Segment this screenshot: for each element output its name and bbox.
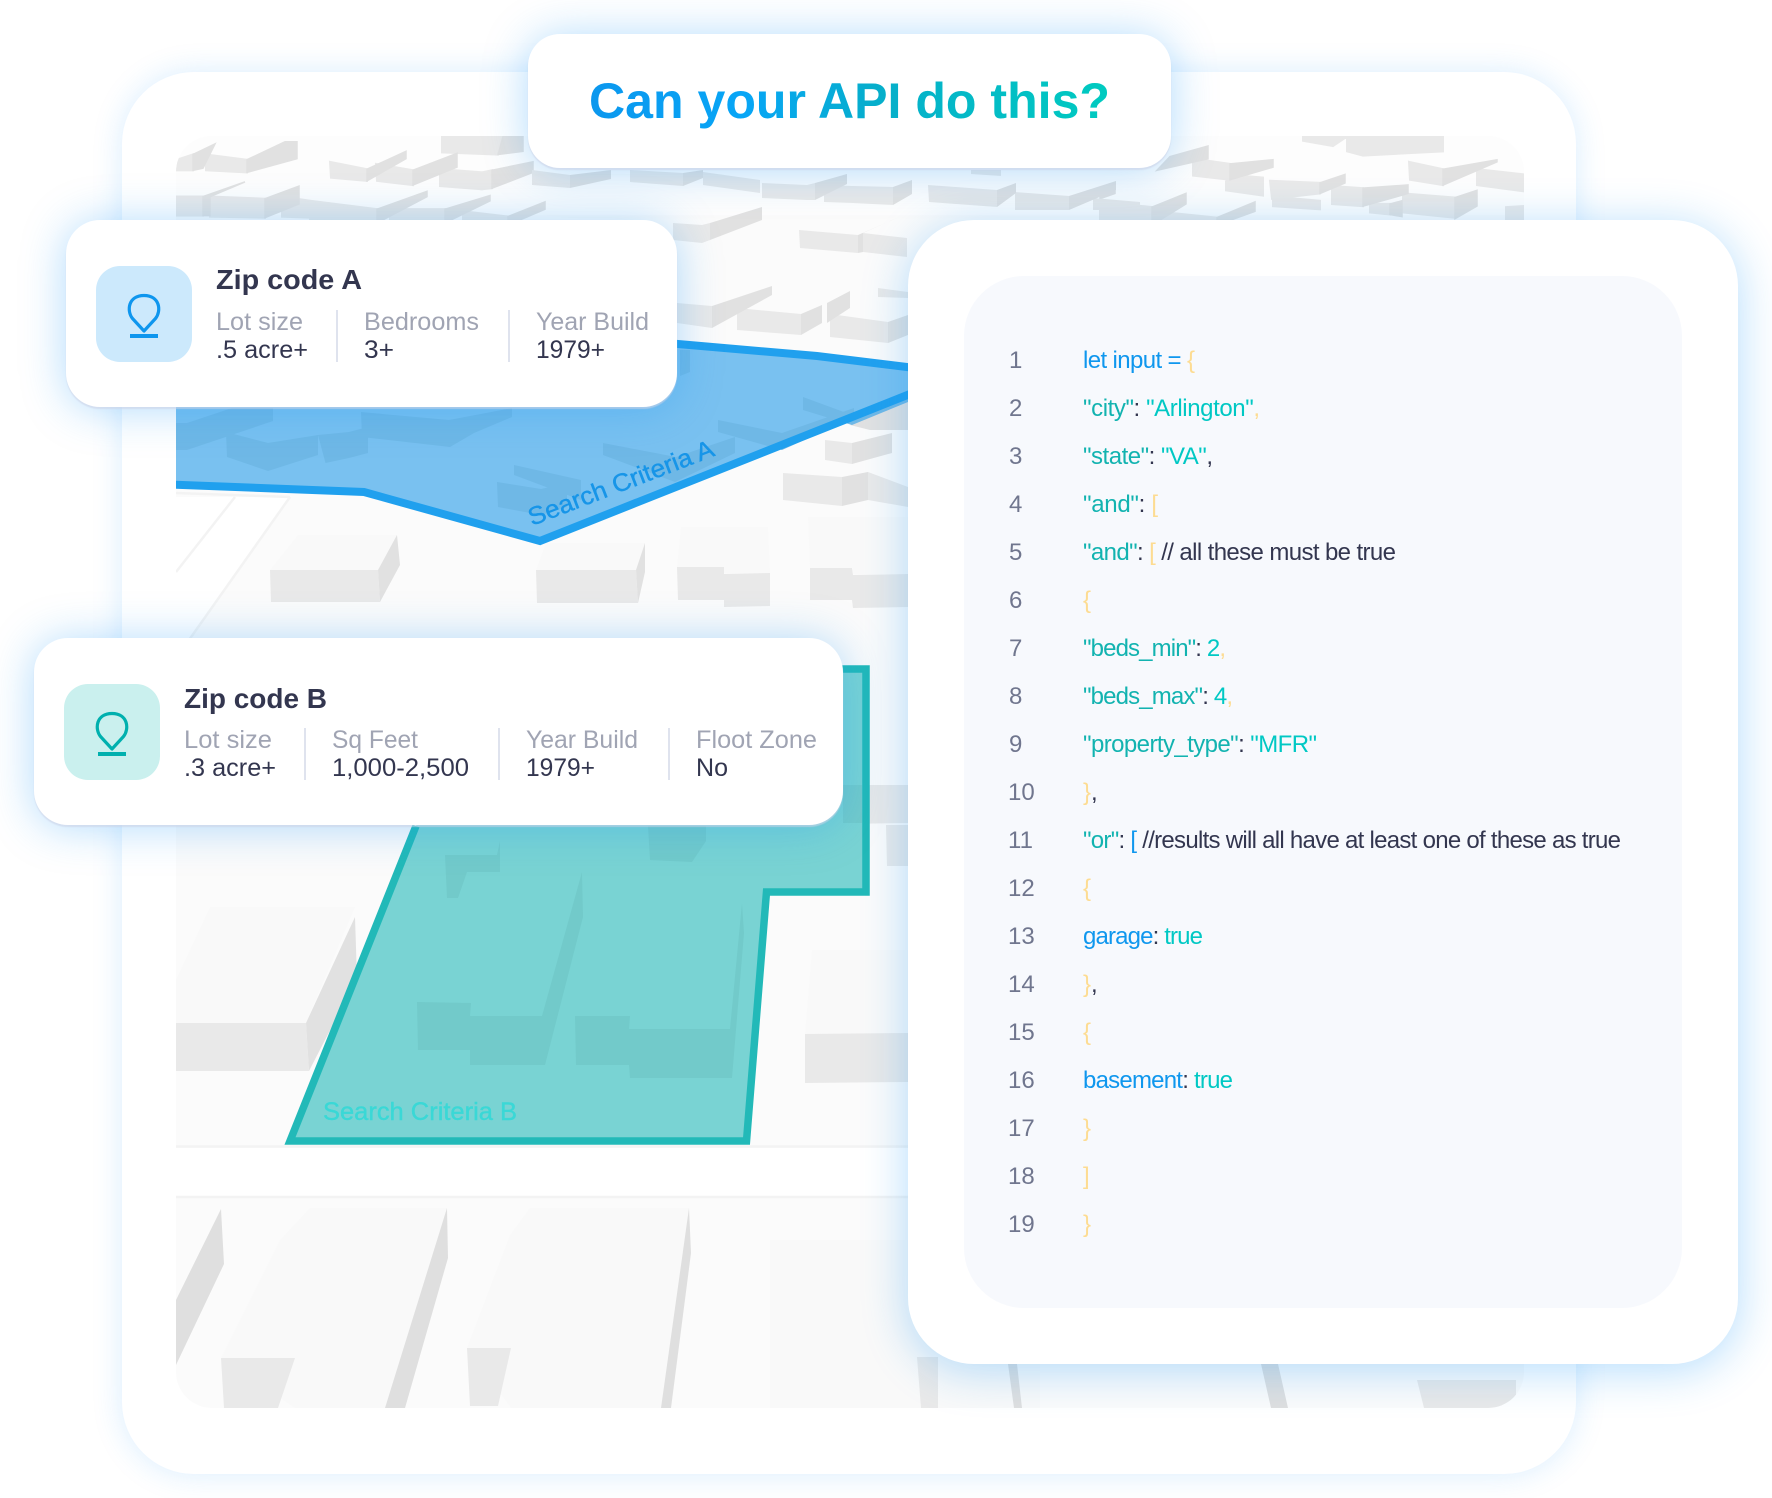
stat: year build: Year Build [526, 726, 638, 754]
code lines: "or": [ //results will all have at least one of these as true [1083, 827, 1621, 854]
line numbers: 16 [1008, 1067, 1035, 1094]
line numbers: 13 [1008, 923, 1035, 950]
title card [528, 34, 1171, 168]
stat: lot size [216, 308, 308, 364]
code lines: }, [1083, 971, 1098, 998]
code lines: { [1083, 587, 1091, 614]
code listing [1008, 347, 1621, 1238]
stat: lot size [184, 726, 276, 782]
panel: Zip code A [66, 220, 677, 407]
stat: sq feet: 1,000-2,500 [332, 754, 469, 782]
line numbers: 18 [1008, 1163, 1035, 1190]
line numbers: 3 [1009, 443, 1022, 470]
line numbers [1008, 347, 1035, 1238]
code lines: "beds_max": 4, [1083, 683, 1233, 710]
stat: year build [536, 308, 649, 364]
search area A [170, 336, 915, 541]
code lines: { [1083, 1019, 1091, 1046]
building fronts: top strip [177, 137, 1524, 225]
stat: lot size: .5 acre+ [216, 336, 308, 364]
Zip code A content [96, 264, 649, 364]
code lines: { [1083, 875, 1091, 902]
icon: location pin B [64, 684, 160, 780]
code lines: } [1083, 1115, 1091, 1142]
Zip code B content [64, 683, 817, 782]
stat: year build: Year Build [536, 308, 649, 336]
line numbers: 4 [1009, 491, 1022, 518]
stat: bedrooms: 3+ [364, 336, 394, 364]
building roofs [176, 517, 1040, 1408]
stat: lot size: Lot size [184, 726, 272, 754]
line numbers: 5 [1009, 539, 1022, 566]
building fronts [176, 170, 1516, 1408]
code lines: "property_type": "MFR" [1083, 731, 1317, 758]
line numbers: 2 [1009, 395, 1022, 422]
heading: Zip code A: Zip code A [216, 264, 362, 295]
map illustration [176, 136, 1524, 1408]
code lines: let input = { [1083, 347, 1195, 374]
stat: sq feet: Sq Feet [332, 726, 418, 754]
stat: sq feet [332, 726, 469, 782]
stat: flood zone [696, 726, 817, 782]
code block [964, 276, 1682, 1308]
code lines [1083, 347, 1621, 1238]
stat: flood zone: No [696, 754, 728, 782]
code lines: } [1083, 1211, 1091, 1238]
label: Search Criteria A: Search Criteria A [524, 435, 718, 532]
icon: location pin A [96, 266, 192, 362]
white roads [176, 497, 1524, 1197]
code lines: }, [1083, 779, 1098, 806]
line numbers: 19 [1008, 1211, 1035, 1238]
building sides [306, 170, 1116, 1071]
code lines: "and": [ [1083, 491, 1158, 518]
code lines: basement: true [1083, 1067, 1233, 1094]
stat: flood zone: Floot Zone [696, 726, 817, 754]
stat: year build [526, 726, 638, 782]
panel: code card [908, 220, 1738, 1364]
stat: year build: 1979+ [526, 754, 595, 782]
panel: main map card [122, 72, 1576, 1474]
code lines: "beds_min": 2, [1083, 635, 1226, 662]
heading: Can your API do this?: Can your API do this? [589, 73, 1110, 129]
stat: bedrooms [364, 308, 479, 364]
line numbers: 14 [1008, 971, 1035, 998]
line numbers: 9 [1009, 731, 1022, 758]
panel: Zip code B [34, 638, 843, 825]
line numbers: 7 [1009, 635, 1022, 662]
code lines: "city": "Arlington", [1083, 395, 1260, 422]
line numbers: 1 [1009, 347, 1022, 374]
line numbers: 17 [1008, 1115, 1035, 1142]
line numbers: 6 [1009, 587, 1022, 614]
line numbers: 10 [1008, 779, 1035, 806]
stat: lot size: Lot size [216, 308, 303, 336]
code lines: "and": [ // all these must be true [1083, 539, 1396, 566]
code lines: garage: true [1083, 923, 1203, 950]
line numbers: 12 [1008, 875, 1035, 902]
line numbers: 8 [1009, 683, 1022, 710]
code lines: "state": "VA", [1083, 443, 1213, 470]
stat: year build: 1979+ [536, 336, 605, 364]
line numbers: 15 [1008, 1019, 1035, 1046]
heading: Zip code B: Zip code B [184, 683, 327, 714]
tall building sides [176, 1208, 1288, 1408]
search area B [290, 669, 866, 1141]
label: Search Criteria B: Search Criteria B [323, 1098, 517, 1126]
stat: lot size: .3 acre+ [184, 754, 276, 782]
stat: bedrooms: Bedrooms [364, 308, 479, 336]
line numbers: 11 [1008, 827, 1033, 854]
code lines: ] [1083, 1163, 1090, 1190]
